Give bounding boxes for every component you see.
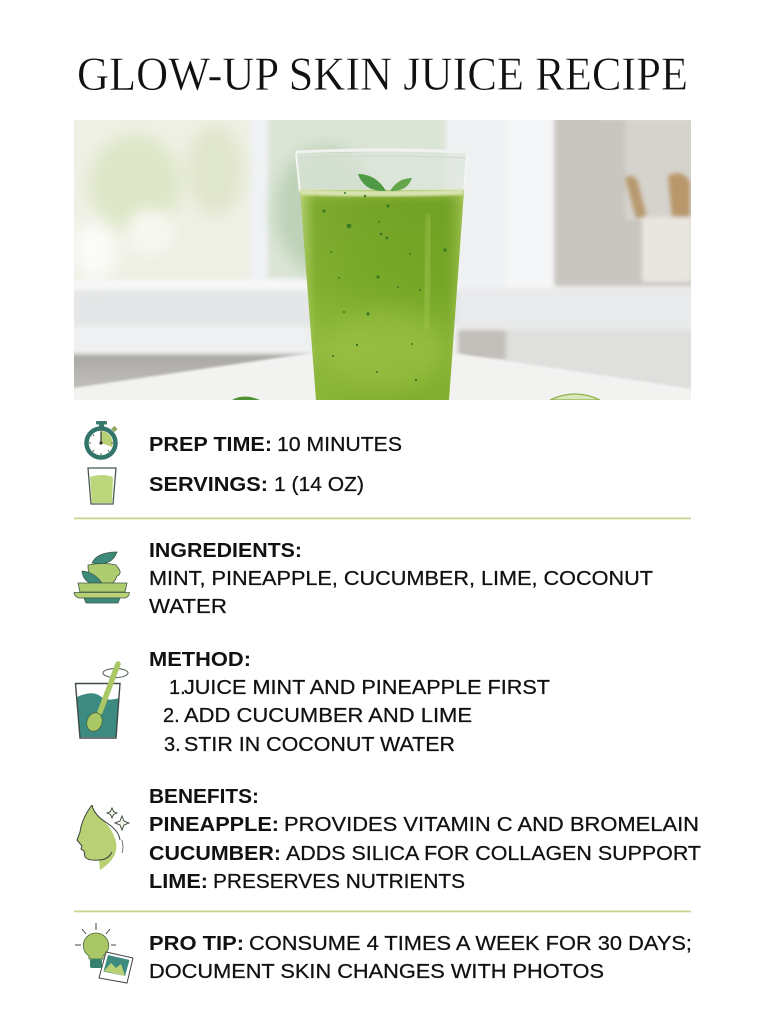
benefits: BENEFITS: <box>149 786 259 808</box>
method: 1. <box>169 677 186 699</box>
method: 3. <box>164 734 181 756</box>
title: GLOW-UP SKIN JUICE RECIPE <box>77 48 688 101</box>
ingredients <box>149 540 653 618</box>
icon: juice glass <box>88 468 116 504</box>
icon: light bulb and photo <box>75 923 133 983</box>
pro tip <box>149 933 692 983</box>
icon: stirring glass <box>76 664 128 738</box>
benefits <box>149 786 701 893</box>
photo: green juice in a glass by a window <box>74 120 691 400</box>
counter top <box>74 353 691 394</box>
prep time <box>149 434 402 456</box>
benefits: CUCUMBER: <box>149 843 281 865</box>
servings: 1 (14 OZ) <box>274 474 364 496</box>
method <box>149 649 550 756</box>
method: STIR IN COCONUT WATER <box>184 734 455 756</box>
servings: SERVINGS: <box>149 474 268 496</box>
icon: stopwatch <box>86 421 118 458</box>
ingredients: INGREDIENTS: <box>149 540 302 562</box>
benefits: PRESERVES NUTRIENTS <box>213 871 465 893</box>
benefits: PROVIDES VITAMIN C AND BROMELAIN <box>284 814 699 836</box>
method: 2. <box>163 705 180 727</box>
method: METHOD: <box>149 649 251 671</box>
method: JUICE MINT AND PINEAPPLE FIRST <box>184 677 550 699</box>
method: ADD CUCUMBER AND LIME <box>184 705 472 727</box>
servings <box>149 474 364 496</box>
glass <box>296 150 467 400</box>
pro tip: DOCUMENT SKIN CHANGES WITH PHOTOS <box>149 961 604 983</box>
icon: glowing face profile <box>77 805 129 870</box>
benefits: ADDS SILICA FOR COLLAGEN SUPPORT <box>286 843 701 865</box>
ingredients: WATER <box>149 596 227 618</box>
pro tip: PRO TIP: <box>149 933 244 955</box>
icon: bowls and leaves <box>74 552 130 603</box>
prep time: PREP TIME: <box>149 434 272 456</box>
benefits: LIME: <box>149 871 208 893</box>
garnish on counter <box>232 396 260 400</box>
ingredients: MINT, PINEAPPLE, CUCUMBER, LIME, COCONUT <box>149 568 653 590</box>
benefits: PINEAPPLE: <box>149 814 279 836</box>
prep time: 10 MINUTES <box>277 434 402 456</box>
mint leaves <box>358 174 386 191</box>
pro tip: CONSUME 4 TIMES A WEEK FOR 30 DAYS; <box>249 933 692 955</box>
